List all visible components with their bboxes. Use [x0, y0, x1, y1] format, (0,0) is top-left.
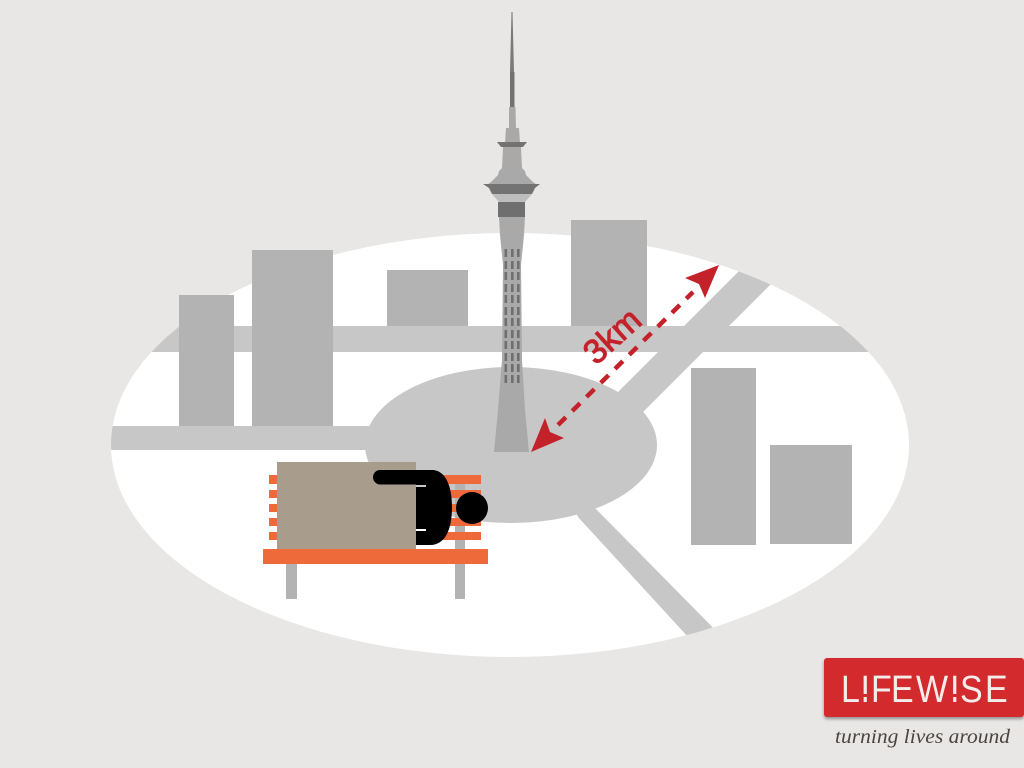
person	[373, 470, 488, 545]
tower windows	[504, 249, 520, 383]
Lifewise logo	[824, 658, 1024, 748]
arrow: 3km distance	[531, 265, 719, 452]
wordmark cut marks	[859, 694, 960, 697]
logo wordmark: LIFEWISE	[841, 667, 1008, 710]
city map	[100, 210, 920, 657]
person sleeping on bench	[263, 462, 488, 599]
tagline: turning lives around	[835, 726, 1011, 748]
blanket	[277, 462, 416, 549]
logo badge	[824, 658, 1024, 717]
Sky Tower	[483, 12, 540, 452]
roads	[111, 272, 868, 635]
distance label: 3km	[576, 301, 649, 372]
bench	[263, 475, 488, 599]
buildings	[179, 220, 852, 545]
